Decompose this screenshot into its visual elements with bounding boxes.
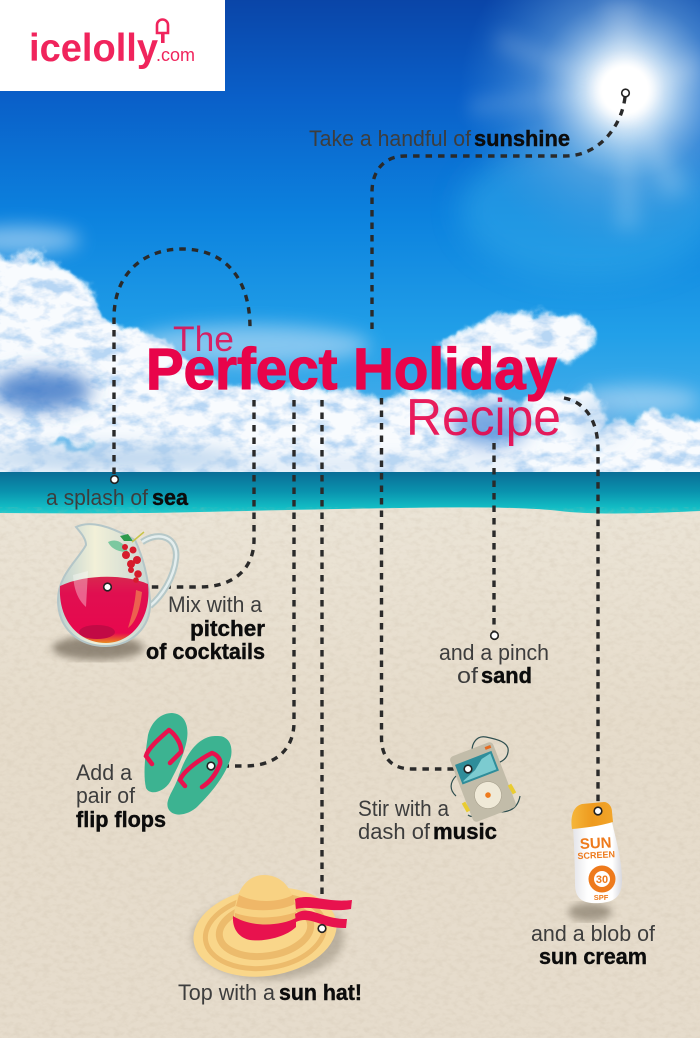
title line: The: The xyxy=(173,320,234,359)
label: music: dash of xyxy=(358,819,431,844)
label: sun cream: sun cream xyxy=(539,944,647,969)
label: sand: and a pinch xyxy=(439,640,549,665)
label: music: music xyxy=(433,819,497,844)
icon: flip flops xyxy=(145,713,232,815)
label: sand: of xyxy=(457,663,479,688)
background: sky xyxy=(0,0,700,480)
background: sea xyxy=(0,472,700,516)
label: sunshine xyxy=(309,126,570,151)
label: sun hat: Top with a xyxy=(178,980,276,1005)
logo suffix: .com xyxy=(156,45,195,65)
label: music: Stir with a xyxy=(358,796,450,821)
logo icon: ice lolly xyxy=(157,20,168,43)
marker: flip flops xyxy=(207,762,215,770)
marker: sea xyxy=(111,476,118,483)
background: sand xyxy=(0,507,700,1038)
label: sunshine: sunshine xyxy=(474,126,570,151)
path: sea to pitcher xyxy=(110,249,254,587)
label: sea: sea xyxy=(152,485,189,510)
icon: sun cream bottle: SPF xyxy=(594,893,609,902)
path: flip flops xyxy=(214,400,294,766)
label: flip flops: flip flops xyxy=(76,807,166,832)
label: sand xyxy=(439,640,549,688)
icon: pitcher of cocktails xyxy=(52,524,176,660)
label: sea: a splash of xyxy=(46,485,149,510)
path: sunshine to music xyxy=(372,97,625,769)
label: flip flops: Add a xyxy=(76,760,133,785)
label: pitcher of cocktails xyxy=(146,592,265,664)
title xyxy=(146,320,561,447)
logo panel xyxy=(0,0,225,91)
label: sand: sand xyxy=(481,663,532,688)
background: clouds xyxy=(0,226,700,490)
label: flip flops xyxy=(76,760,166,832)
icon: sun cream bottle: SUN xyxy=(579,834,612,853)
label: sun cream: and a blob of xyxy=(531,921,656,946)
icon: sun hat xyxy=(188,875,352,986)
title line: Perfect Holiday: Perfect Holiday xyxy=(146,337,557,402)
marker: pitcher xyxy=(104,583,111,591)
label: sun cream xyxy=(531,921,656,969)
logo wordmark: icelolly xyxy=(29,27,158,70)
marker: sand xyxy=(491,632,498,639)
marker: music xyxy=(464,765,472,773)
icon: sun cream bottle: SCREEN xyxy=(577,849,615,861)
title line: Recipe: Recipe xyxy=(406,389,561,447)
label: music xyxy=(358,796,497,844)
icon: music player xyxy=(449,737,520,823)
path: sand xyxy=(492,443,496,632)
icon: sun cream bottle xyxy=(568,802,622,921)
label: sun hat: sun hat! xyxy=(279,980,362,1005)
label: pitcher of cocktails: of cocktails xyxy=(146,639,265,664)
label: flip flops: pair of xyxy=(76,783,136,808)
label: pitcher of cocktails: Mix with a xyxy=(168,592,263,617)
label: sun hat xyxy=(178,980,362,1005)
marker: sun cream xyxy=(594,807,602,815)
label: sunshine: Take a handful of xyxy=(309,126,472,151)
path: sun hat xyxy=(320,400,324,925)
marker: sun hat xyxy=(318,925,326,932)
label: pitcher of cocktails: pitcher xyxy=(190,616,265,641)
marker: sunshine xyxy=(622,89,629,97)
path: sun cream xyxy=(564,398,598,806)
icon: sun cream bottle: 30 xyxy=(596,874,608,886)
